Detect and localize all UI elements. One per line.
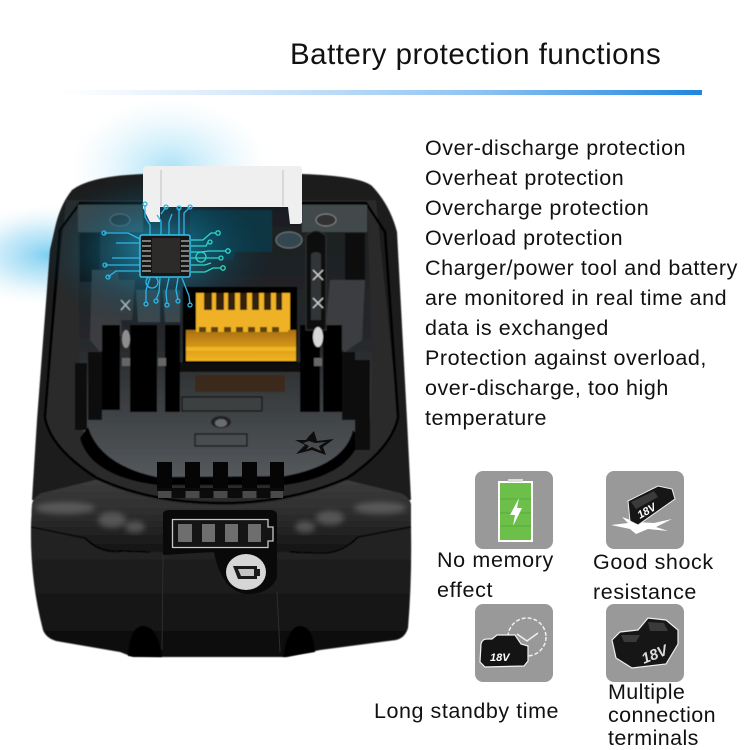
battery illustration — [0, 112, 412, 658]
label: no memory effect — [437, 548, 554, 602]
icon: shock resistance — [606, 471, 684, 549]
list line: Overload protection — [425, 226, 623, 250]
label: good shock resistance: resistance — [593, 580, 697, 604]
list line: are monitored in real time and — [425, 286, 727, 310]
white release tab — [143, 166, 302, 224]
teal glow over plate — [54, 185, 254, 314]
label: multiple connection terminals: Multiple — [608, 680, 685, 704]
top plate — [45, 200, 398, 505]
label: multiple connection terminals: connection — [608, 703, 716, 727]
icon: battery charge — [475, 471, 553, 549]
icon: connection terminals: 18V — [639, 641, 672, 668]
list line: Over-discharge protection — [425, 136, 686, 160]
rear rib vents — [157, 462, 284, 498]
label: long standby time: Long standby time — [374, 699, 559, 723]
list line: Overheat protection — [425, 166, 624, 190]
icon: standby time — [475, 604, 553, 682]
glow behind battery — [0, 98, 270, 305]
center front panel edges — [162, 555, 280, 652]
battery body — [31, 174, 411, 657]
label: good shock resistance: Good shock — [593, 550, 714, 574]
list line: Charger/power tool and battery — [425, 256, 738, 280]
label: multiple connection terminals — [608, 680, 716, 750]
list line: over-discharge, too high — [425, 376, 669, 400]
body side highlights — [35, 502, 406, 533]
list line: Overcharge protection — [425, 196, 649, 220]
yellow connector — [183, 287, 297, 363]
icon: standby time: 18V — [490, 652, 511, 664]
label: no memory effect: effect — [437, 578, 493, 602]
icon: shock resistance: 18V — [636, 501, 660, 522]
star mark — [295, 431, 334, 455]
label: multiple connection terminals: terminals — [608, 726, 699, 750]
label: no memory effect: No memory — [437, 548, 554, 572]
list line: data is exchanged — [425, 316, 609, 340]
title: Battery protection functions — [290, 38, 661, 71]
list line: temperature — [425, 406, 547, 430]
circuit chip graphic — [102, 202, 230, 307]
bottom feet — [128, 626, 315, 657]
title underline gradient bar — [60, 90, 702, 95]
icon: connection terminals — [606, 604, 684, 682]
list line: Protection against overload, — [425, 346, 707, 370]
protection function list — [425, 136, 738, 430]
label: good shock resistance — [593, 550, 714, 604]
battery level indicator — [163, 510, 277, 594]
